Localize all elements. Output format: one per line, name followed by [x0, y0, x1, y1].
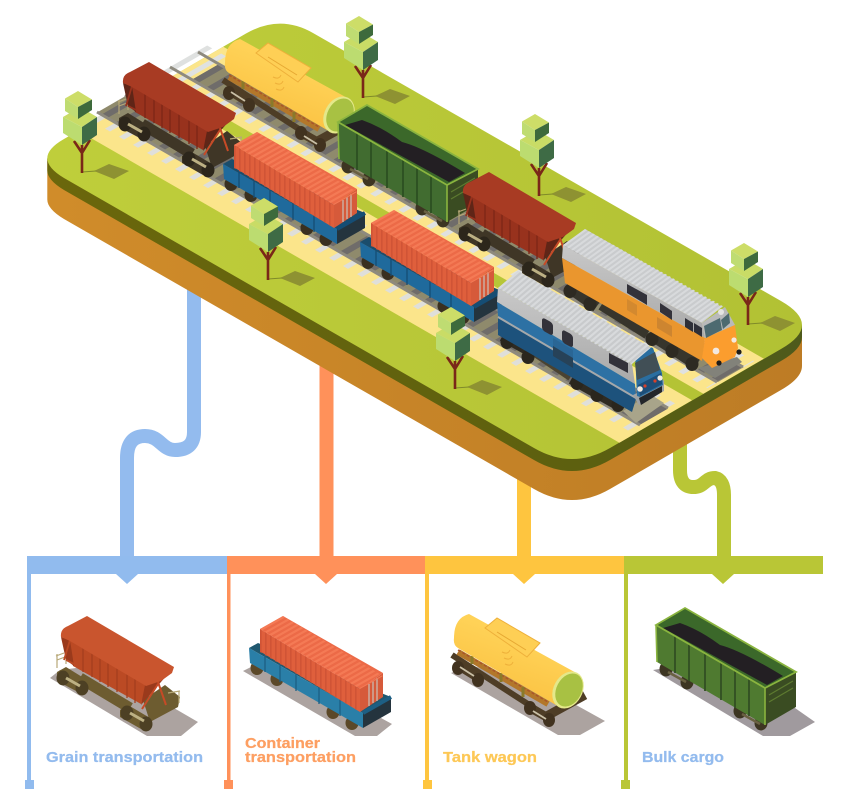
header bar: tank — [425, 556, 624, 782]
scene wagon: container 1 — [223, 132, 365, 246]
locomotive: orange — [562, 229, 742, 378]
end marker: grain — [25, 780, 34, 789]
track: front rails and sleepers — [97, 95, 668, 425]
connector: container line — [320, 360, 334, 560]
platform: railway island — [47, 24, 802, 500]
shadow: gondola wagon — [653, 668, 815, 736]
connector: grain line — [127, 285, 194, 560]
label: container transportation: transportation — [245, 750, 356, 766]
wagon: container — [249, 616, 391, 730]
tree: back right — [520, 114, 586, 202]
header bar: grain — [27, 556, 227, 782]
end marker: tank — [423, 780, 432, 789]
connector: bulk line — [680, 430, 724, 560]
tree: front centre-left — [249, 198, 315, 286]
end marker: container — [224, 780, 233, 789]
shadow: tank wagon — [451, 665, 605, 735]
tree: far right — [729, 243, 795, 331]
end marker: bulk — [621, 780, 630, 789]
shadow: hopper wagon — [50, 665, 198, 736]
label: tank wagon: Tank wagon — [443, 750, 537, 766]
scene wagon: container 2 — [360, 210, 502, 324]
connector: tank line — [517, 470, 531, 560]
wagon: hopper — [56, 616, 180, 732]
panel: tank wagon — [423, 556, 624, 789]
tree: far left — [63, 91, 129, 179]
scene wagon: tank — [223, 39, 361, 152]
wagon: gondola — [656, 608, 796, 730]
panel: container transportation — [224, 556, 425, 789]
tree: front centre — [436, 307, 502, 395]
header bar: bulk — [624, 556, 823, 782]
label: bulk cargo: Bulk cargo — [642, 750, 724, 766]
label: grain transportation: Grain transportation — [46, 750, 203, 766]
track: rear rails and sleepers — [170, 52, 743, 382]
shadow: container wagon — [243, 665, 392, 736]
scene wagon: hopper front — [118, 62, 242, 178]
locomotive: blue — [497, 271, 664, 423]
wagon: tank — [452, 614, 590, 727]
panel: grain transportation — [25, 556, 227, 789]
header bar: container — [227, 556, 425, 782]
label: container transportation: Container — [245, 736, 320, 752]
scene wagon: bulk gondola — [338, 105, 478, 228]
sand strip: rear track — [163, 47, 764, 394]
tree: back centre — [344, 16, 410, 104]
panel: bulk cargo — [621, 556, 823, 789]
scene wagon: hopper rear — [458, 172, 582, 288]
sand strip: front track — [78, 88, 692, 443]
